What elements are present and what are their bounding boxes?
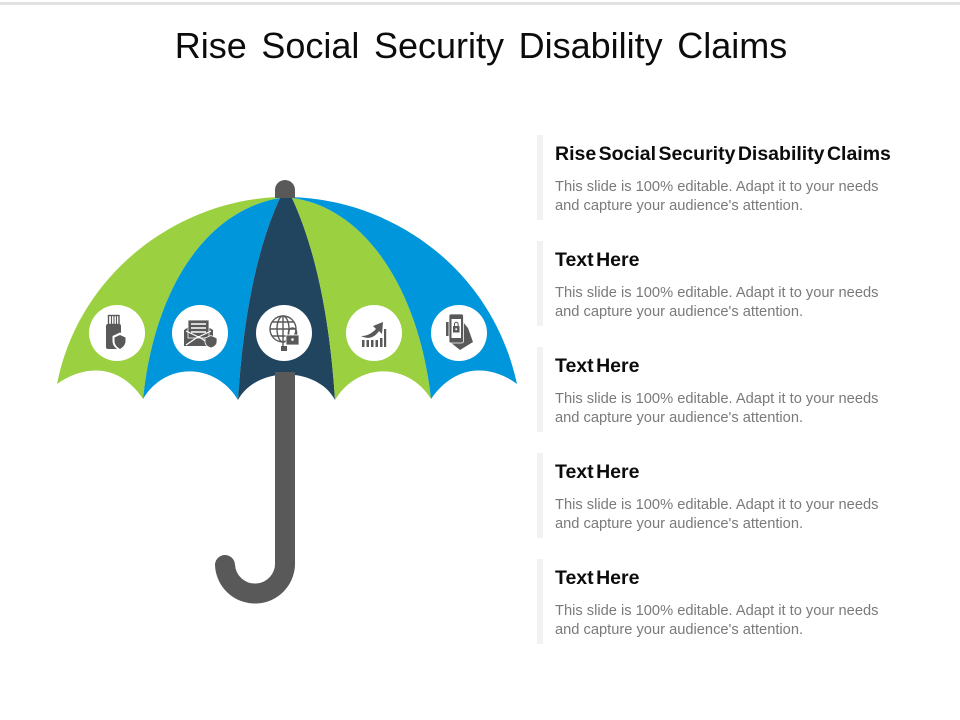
icon: phone with padlock in hand <box>431 305 487 361</box>
canopy panel: center navy <box>238 198 335 400</box>
canopy panel: left blue <box>143 198 280 400</box>
title: Rise Social Security Disability Claims <box>175 25 787 66</box>
canopy panel: outer left green <box>57 197 285 399</box>
canopy panel: outer right blue <box>285 197 517 399</box>
text block 2 <box>537 241 878 326</box>
text block 3: and capture your audience's attention. <box>555 410 803 426</box>
umbrella top knob <box>275 180 295 198</box>
canopy panel: right green <box>292 198 431 400</box>
text block 3: Text Here <box>555 354 639 376</box>
text block 4: This slide is 100% editable. Adapt it to your needs <box>555 497 878 513</box>
umbrella handle <box>225 372 285 594</box>
text block 4: Text Here <box>555 460 639 482</box>
icon: rising chart arrow <box>346 305 402 361</box>
text block 2: and capture your audience's attention. <box>555 304 803 320</box>
text block 5 <box>537 559 878 644</box>
text block 1: and capture your audience's attention. <box>555 198 803 214</box>
text block 1: This slide is 100% editable. Adapt it to your needs <box>555 179 878 195</box>
text block 3 <box>537 347 878 432</box>
text block 4 <box>537 453 878 538</box>
icon: globe with padlock <box>256 305 312 361</box>
text block 5: Text Here <box>555 566 639 588</box>
text block 5: and capture your audience's attention. <box>555 622 803 638</box>
text block 1: Rise Social Security Disability Claims <box>555 142 891 164</box>
text block 5: This slide is 100% editable. Adapt it to your needs <box>555 603 878 619</box>
text block 1 <box>537 135 891 220</box>
icon: envelope with shield <box>172 305 228 361</box>
text block 4: and capture your audience's attention. <box>555 516 803 532</box>
icon: USB drive with shield <box>89 305 145 361</box>
shaft over canopy bottom <box>275 372 295 402</box>
text block 3: This slide is 100% editable. Adapt it to your needs <box>555 391 878 407</box>
text block 2: Text Here <box>555 248 639 270</box>
text block 2: This slide is 100% editable. Adapt it to your needs <box>555 285 878 301</box>
